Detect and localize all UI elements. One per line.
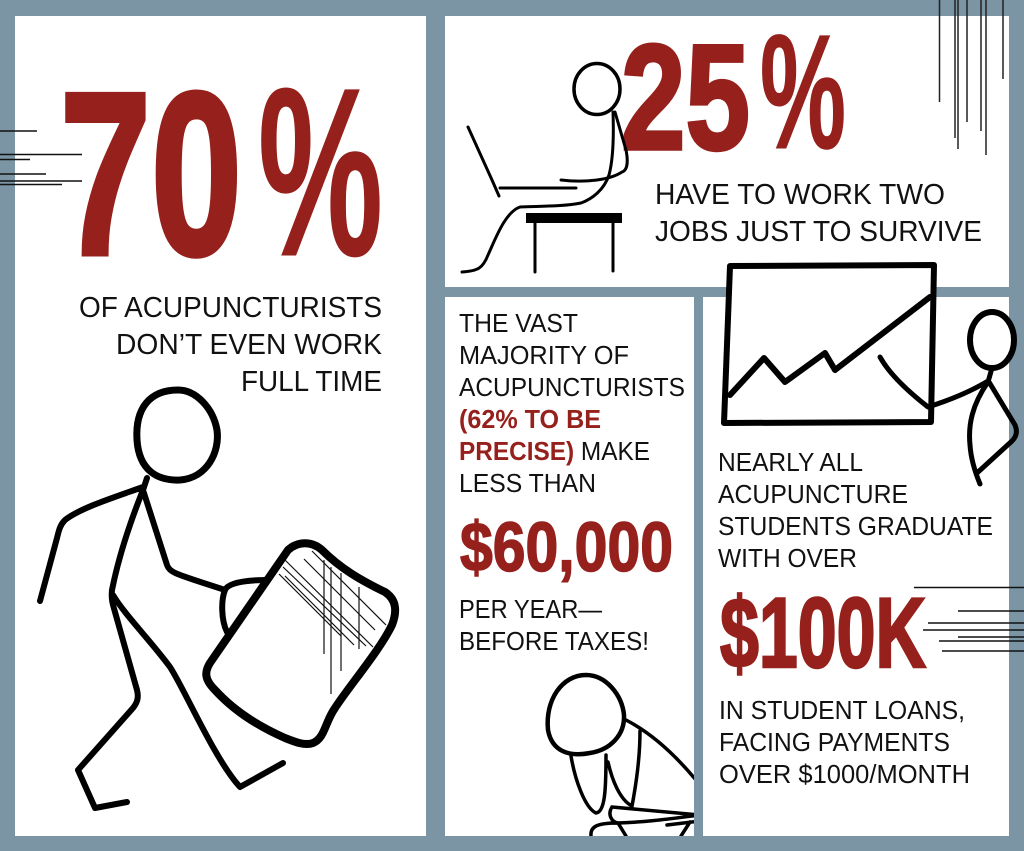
panel: 25 percent [445, 0, 1009, 287]
heading: 70%: 70 [60, 45, 242, 304]
icon: slumped figure [548, 675, 700, 836]
panel: income [445, 297, 700, 836]
heading: 25%: % [760, 0, 846, 183]
text: vast majority: MAJORITY OF [459, 340, 629, 370]
text: of acupuncturists: FULL TIME [241, 366, 382, 398]
icon: seated figure at laptop [462, 64, 627, 272]
text: two jobs: HAVE TO WORK TWO [655, 179, 945, 211]
icon: chart board [724, 265, 934, 423]
icon: walking figure with briefcase [40, 390, 395, 808]
text: per year: BEFORE TAXES! [459, 626, 649, 656]
text: of acupuncturists [79, 292, 383, 398]
text: of acupuncturists: OF ACUPUNCTURISTS [79, 292, 382, 324]
text: nearly all [718, 447, 993, 573]
text: vast majority: LESS THAN [459, 468, 596, 498]
heading: 25%: 25 [621, 13, 750, 181]
text: student loans: OVER $1000/MONTH [719, 759, 970, 789]
speed lines top right [940, 0, 1003, 155]
figure: $60,000: $60,000 [460, 508, 673, 586]
text: per year: PER YEAR— [459, 594, 602, 624]
text: vast majority: ACUPUNCTURISTS [459, 372, 685, 402]
text: vast majority: PRECISE) MAKE [459, 436, 650, 466]
text: two jobs [655, 179, 982, 248]
figure: $100K: $100K [720, 577, 926, 688]
panel: 70 percent [0, 16, 426, 836]
text: student loans [719, 695, 970, 789]
text: student loans: IN STUDENT LOANS, [719, 695, 965, 725]
text: of acupuncturists: DON’T EVEN WORK [116, 329, 383, 361]
text: vast majority: (62% TO BE [459, 404, 601, 434]
text: student loans: FACING PAYMENTS [719, 727, 950, 757]
text: nearly all: NEARLY ALL [718, 447, 863, 477]
table [526, 213, 622, 272]
heading: 25% [621, 0, 846, 183]
text: nearly all: STUDENTS GRADUATE [718, 511, 993, 541]
text: nearly all: ACUPUNCTURE [718, 479, 908, 509]
speed lines left [0, 131, 82, 184]
icon: presenting figure [880, 312, 1016, 484]
panel: student loans [703, 265, 1009, 836]
text: vast majority: THE VAST [459, 308, 578, 338]
text: nearly all: WITH OVER [718, 543, 857, 573]
heading: 70%: % [258, 38, 383, 306]
text: per year [459, 594, 649, 656]
speed lines right [914, 588, 1024, 651]
text: vast majority [459, 308, 685, 498]
text: two jobs: JOBS JUST TO SURVIVE [655, 216, 982, 248]
